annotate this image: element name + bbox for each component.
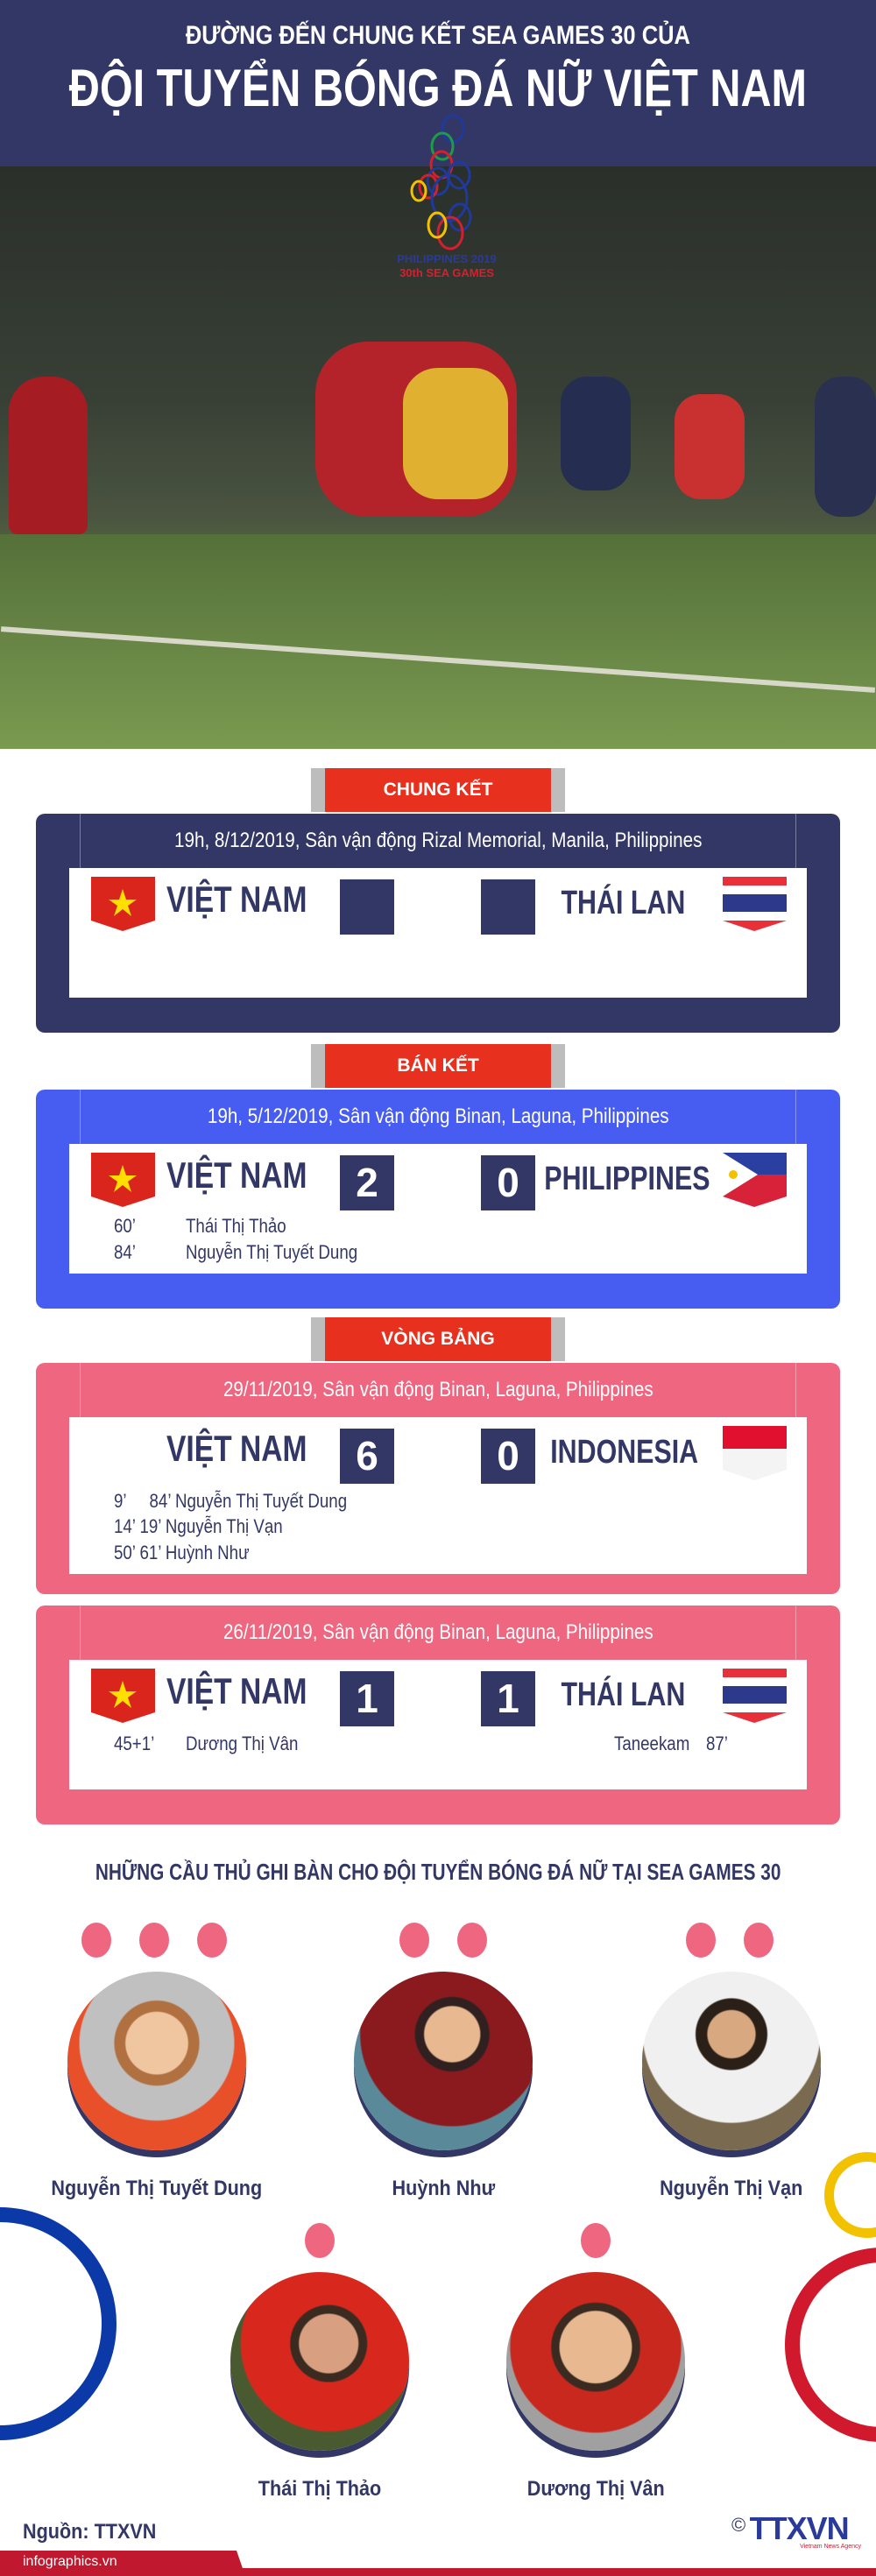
logo: SEA Games 30 rings: PHILIPPINES 2019 [397, 252, 497, 265]
team: Philippines: PHILIPPINES [544, 1161, 710, 1197]
match info [80, 814, 796, 868]
title line 2: ĐỘI TUYỂN BÓNG ĐÁ NỮ VIỆT NAM [69, 59, 807, 117]
player: Dương Thị Vân: Dương Thị Vân [527, 2477, 664, 2501]
flag: Vietnam [91, 1153, 155, 1207]
source: Nguồn: TTXVN [23, 2520, 156, 2544]
match info: 26/11/2019, Sân vận động Binan, Laguna, Philippines [223, 1620, 653, 1644]
flag: Indonesia [723, 1426, 787, 1480]
team: Indonesia: INDONESIA [550, 1434, 698, 1471]
team: Thái Lan: THÁI LAN [561, 885, 685, 921]
panel: semi-final: 84’ [114, 1241, 136, 1263]
heading: scorers: NHỮNG CẦU THỦ GHI BÀN CHO ĐỘI TUYỂN BÓNG ĐÁ NỮ TẠI SEA GAMES 30 [95, 1859, 781, 1885]
match info [80, 1090, 796, 1144]
score: 1: 1 [497, 1676, 519, 1721]
flag: Vietnam [91, 877, 155, 931]
score: 2 [340, 1155, 394, 1210]
match info [80, 1363, 796, 1417]
panel: semi-final: Thái Thị Thảo [186, 1215, 286, 1237]
tab: vòng bảng: VÒNG BẢNG [381, 1329, 495, 1349]
score: 0: 0 [497, 1433, 519, 1479]
team: Việt Nam: VIỆT NAM [166, 1670, 307, 1711]
player: Nguyễn Thị Vạn: Nguyễn Thị Vạn [660, 2177, 803, 2200]
player: Thái Thị Thảo [230, 2223, 409, 2501]
match info [80, 1606, 796, 1660]
footer text: infographics.vn [23, 2554, 117, 2569]
score: 0 [481, 1155, 535, 1210]
player: Nguyễn Thị Vạn [642, 1923, 821, 2200]
team: Thái Lan: THÁI LAN [561, 1676, 685, 1713]
player: Huỳnh Như [354, 1923, 533, 2200]
panel: group match vs Indonesia: 14’ 19’ Nguyễn Thị Vạn [114, 1515, 283, 1537]
score: 0 [481, 1429, 535, 1484]
decorative rings [0, 2207, 117, 2440]
scorers: 60’ [114, 1215, 136, 1237]
panel: semi-final [36, 1090, 840, 1309]
tab: bán kết: BÁN KẾT [397, 1055, 479, 1076]
team: Việt Nam: VIỆT NAM [166, 1154, 307, 1196]
tab: chung kết [311, 768, 565, 812]
logo: TTXVN: Vietnam News Agency [800, 2544, 861, 2550]
footer bar [0, 2551, 876, 2576]
panel: group match vs Thailand: Dương Thị Vân [186, 1733, 298, 1754]
score: 1 [481, 1671, 535, 1726]
score boxes [340, 879, 394, 935]
flag: Philippines [723, 1153, 787, 1207]
match info: 29/11/2019, Sân vận động Binan, Laguna, Philippines [223, 1378, 653, 1401]
score: 6 [340, 1429, 394, 1484]
player: Thái Thị Thảo: Thái Thị Thảo [258, 2477, 381, 2501]
score: 6: 6 [356, 1433, 378, 1479]
match info: 19h, 5/12/2019, Sân vận động Binan, Laguna, Philippines [208, 1105, 668, 1128]
player: Huỳnh Như: Huỳnh Như [392, 2177, 495, 2200]
header band [0, 0, 876, 166]
panel: group match vs Indonesia: 50’ 61’ Huỳnh Như [114, 1542, 250, 1563]
title line 1: ĐƯỜNG ĐẾN CHUNG KẾT SEA GAMES 30 CỦA [186, 21, 690, 50]
flag: Vietnam [91, 1669, 155, 1723]
team: Việt Nam: VIỆT NAM [166, 1428, 307, 1469]
panel: final [36, 814, 840, 1033]
score: 2: 2 [356, 1160, 378, 1205]
player: Nguyễn Thị Tuyết Dung: Nguyễn Thị Tuyết Dung [52, 2177, 262, 2200]
logo: TTXVN: © TTXVN [731, 2510, 849, 2546]
panel: group match vs Thailand: Taneekam [614, 1733, 689, 1754]
tab: chung kết: CHUNG KẾT [384, 780, 492, 800]
panel: group match vs Thailand [36, 1606, 840, 1824]
scorers: 9’ 84’ Nguyễn Thị Tuyết Dung [114, 1490, 347, 1512]
player: Nguyễn Thị Tuyết Dung [52, 1923, 262, 2200]
flag: Thailand [723, 1669, 787, 1723]
match info: 19h, 8/12/2019, Sân vận động Rizal Memorial, Manila, Philippines [174, 829, 702, 852]
panel: semi-final: Nguyễn Thị Tuyết Dung [186, 1241, 357, 1263]
team: Việt Nam: VIỆT NAM [166, 879, 307, 920]
score: 1 [340, 1671, 394, 1726]
tab: bán kết [311, 1044, 565, 1088]
tab: vòng bảng [311, 1317, 565, 1361]
panel: group match vs Indonesia [36, 1363, 840, 1594]
flag: Thailand [723, 877, 787, 931]
scorers: 45+1’ [114, 1733, 154, 1754]
photo: celebrating team [0, 166, 876, 749]
logo: SEA Games 30 rings [397, 114, 497, 279]
logo: SEA Games 30 rings: 30th SEA GAMES [399, 266, 494, 279]
score: 1: 1 [356, 1676, 378, 1721]
player: Dương Thị Vân [506, 2223, 685, 2501]
panel: group match vs Thailand: 87’ [706, 1733, 728, 1754]
score: 0: 0 [497, 1160, 519, 1205]
